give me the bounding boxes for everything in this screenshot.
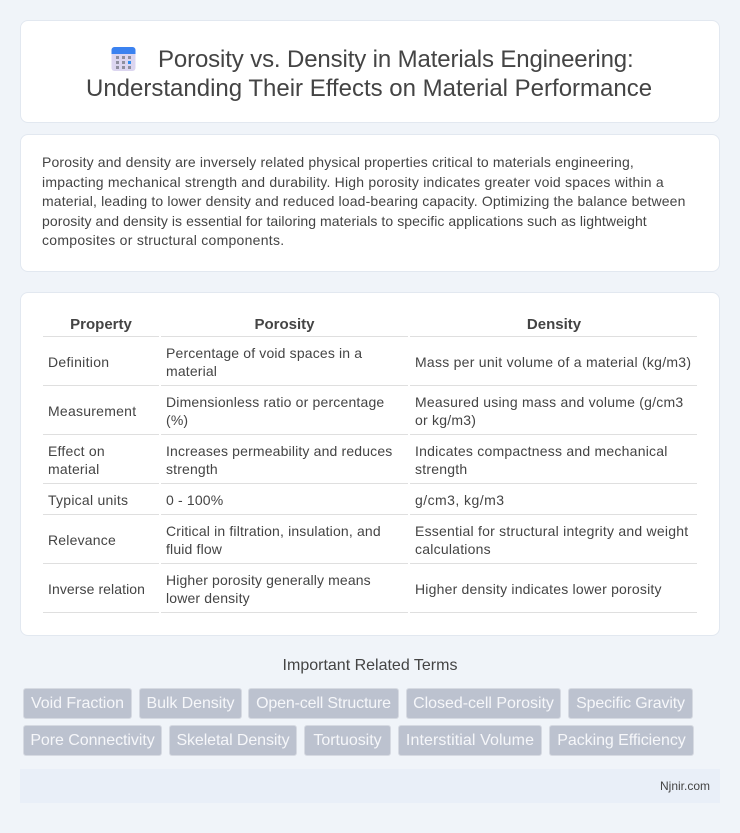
row: relevance: Critical in filtration, insulation, and	[166, 523, 381, 539]
related terms chips: Bulk Density	[147, 695, 234, 712]
intro paragraph: composites or structural components.	[42, 232, 284, 248]
row: effect on material	[48, 443, 668, 477]
row: inverse relation: Higher porosity generally means	[166, 572, 371, 588]
row: inverse relation: Inverse relation	[48, 581, 145, 597]
related terms chips: Tortuosity	[313, 732, 382, 749]
row: definition: material	[166, 363, 217, 379]
related terms chips: Skeletal Density	[176, 732, 290, 749]
related terms chips: Closed-cell Porosity	[413, 695, 554, 712]
row: inverse relation: Higher density indicates lower porosity	[415, 581, 662, 597]
footer credit: Njnir.com	[660, 779, 710, 793]
row: relevance: Relevance	[48, 532, 116, 548]
table header: Density	[527, 316, 581, 333]
row: relevance: calculations	[415, 541, 491, 557]
row: inverse relation	[48, 572, 662, 606]
row: relevance	[48, 523, 688, 557]
row: measurement: Measurement	[48, 403, 136, 419]
row: definition: Mass per unit volume of a material (kg/m3)	[415, 354, 691, 370]
related terms chips: Interstitial Volume	[406, 732, 534, 749]
row: effect on material: Effect on	[48, 443, 105, 459]
row: typical units: 0 - 100%	[166, 492, 223, 508]
related terms chips	[23, 688, 694, 756]
row: definition: Definition	[48, 354, 109, 370]
row: effect on material: Increases permeability and reduces	[166, 443, 392, 459]
row: measurement: Dimensionless ratio or percentage	[166, 394, 384, 410]
related terms chips: Specific Gravity	[576, 695, 685, 712]
related terms chips: Void Fraction	[31, 695, 124, 712]
header panel	[20, 20, 720, 123]
related terms chips: Open-cell Structure	[256, 695, 391, 712]
row: effect on material: material	[48, 461, 99, 477]
row: relevance: fluid flow	[166, 541, 222, 557]
row: typical units: g/cm3, kg/m3	[415, 492, 504, 508]
icon: calendar	[112, 47, 136, 71]
table header: Property	[70, 316, 132, 333]
row: typical units: Typical units	[48, 492, 128, 508]
title: Understanding Their Effects on Material Performance	[86, 75, 652, 102]
related terms chips: Pore Connectivity	[30, 732, 155, 749]
intro paragraph: Porosity and density are inversely related physical properties critical to materials engineering,	[42, 154, 634, 170]
table header	[70, 316, 581, 333]
row: typical units	[48, 492, 504, 508]
row: inverse relation: lower density	[166, 590, 250, 606]
row: measurement: (%)	[166, 412, 188, 428]
row: effect on material: Indicates compactness and mechanical	[415, 443, 668, 459]
row: definition: Percentage of void spaces in a	[166, 345, 362, 361]
related terms chips: Packing Efficiency	[557, 732, 686, 749]
footer bar	[20, 769, 720, 803]
table header: Porosity	[254, 316, 314, 333]
intro paragraph	[42, 154, 686, 248]
row: measurement: Measured using mass and volume (g/cm3	[415, 394, 683, 410]
comparison table	[43, 316, 697, 613]
row: measurement	[48, 394, 683, 428]
title: Porosity vs. Density in Materials Engineering:	[158, 46, 634, 73]
row: definition	[48, 345, 691, 379]
intro text panel	[20, 134, 720, 272]
row: effect on material: strength	[415, 461, 467, 477]
row: measurement: or kg/m3)	[415, 412, 476, 428]
intro paragraph: material, leading to lower density and reduced load-bearing capacity. Optimizing the balance between	[42, 193, 686, 209]
related terms heading: Important Related Terms	[283, 657, 457, 674]
row: effect on material: strength	[166, 461, 218, 477]
intro paragraph: porosity and density is essential for tailoring materials to specific applications such as lightweight	[42, 212, 647, 228]
table panel	[20, 292, 720, 636]
intro paragraph: impacting mechanical strength and durability. High porosity indicates greater void spaces within a	[42, 174, 664, 190]
title	[86, 46, 652, 102]
row: relevance: Essential for structural integrity and weight	[415, 523, 688, 539]
